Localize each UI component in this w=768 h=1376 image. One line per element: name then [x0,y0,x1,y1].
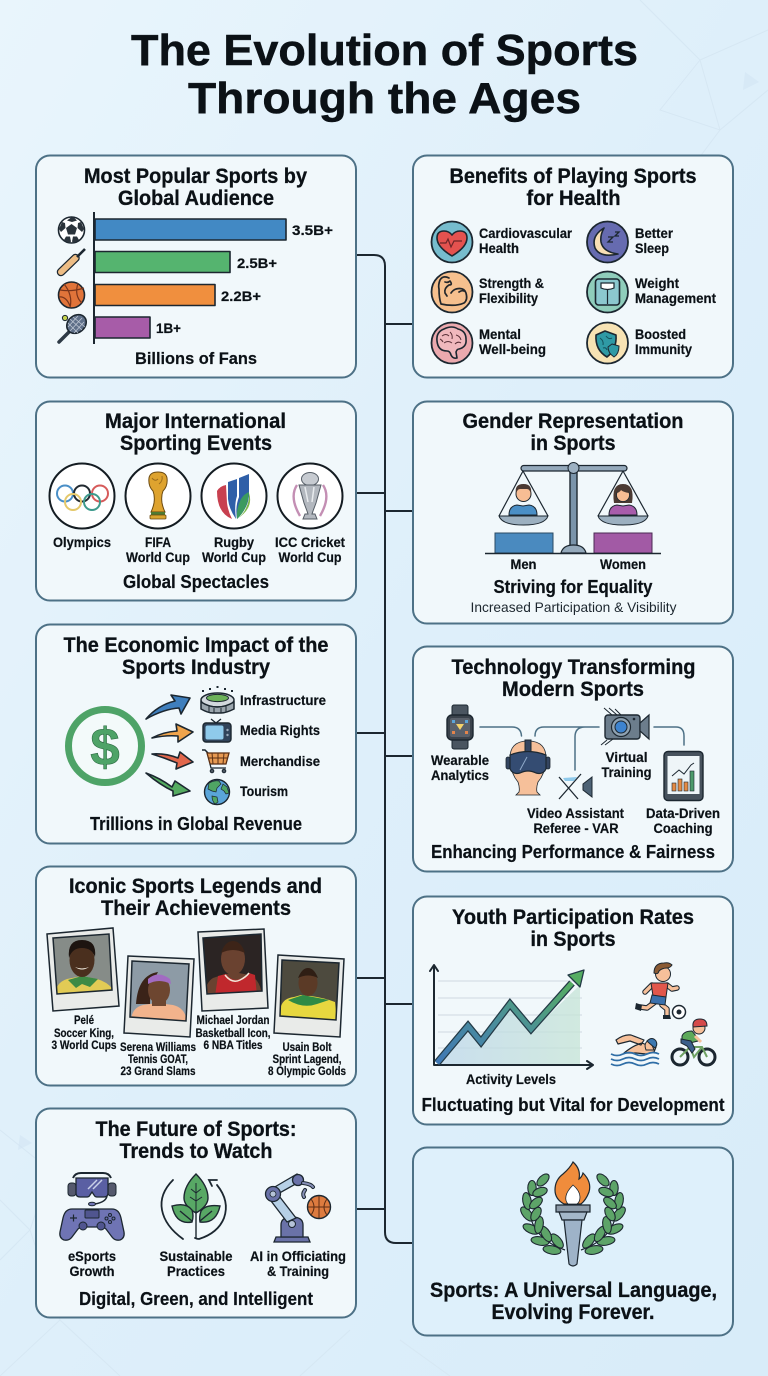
icon: child running with ball [635,963,686,1019]
heading: events [105,410,286,455]
icon: torch and laurel [518,1162,628,1266]
heading: youth: Youth Participation Rates [452,906,694,929]
trend: ai robot arm [250,1174,346,1279]
title [131,26,638,123]
connectors between technologies [480,727,684,770]
icon: soccer ball [58,217,84,243]
trend: sustainable practices: Sustainable [160,1249,233,1264]
icon: basketball [58,282,84,308]
heading: technology [452,656,696,701]
label: women: Women [600,557,646,572]
heading: most popular sports: Most Popular Sports by [84,165,307,188]
benefit: weight management: Management [635,290,716,306]
legend: pele: Soccer King, [54,1028,114,1040]
stream: merchandise [202,750,320,773]
icon: dollar coin: $ [90,718,120,777]
trend: sustainable practices [160,1174,233,1279]
heading: youth: in Sports [530,928,616,951]
caption: striving for equality: Striving for Equality [494,577,652,597]
panel: most popular sports [36,156,356,378]
tech: wearable analytics [431,705,489,783]
panel: youth participation [413,896,733,1124]
tech: virtual training camera [601,708,652,780]
tech: wearable analytics: Analytics [431,768,489,783]
tech: data-driven coaching: Coaching [654,821,712,836]
legend: michael jordan [196,929,270,1052]
heading: gender [462,410,684,455]
benefit: strength and flexibility [432,272,544,312]
event: rugby world cup [202,464,266,565]
heading: youth [452,906,694,951]
axis label: activity levels: Activity Levels [466,1072,556,1087]
panel: gender representation [413,402,733,624]
tech: virtual training camera: Training [602,765,652,780]
stream: infrastructure [201,686,326,713]
legend: serena williams [120,956,196,1078]
legend: usain bolt: Sprint Lagend, [272,1054,342,1066]
heading: economic impact [64,634,328,679]
caption: digital green intelligent: Digital, Green, and Intelligent [79,1289,313,1309]
panel: economic impact [36,624,356,844]
legend: serena williams: 23 Grand Slams [120,1066,196,1078]
heading: gender: in Sports [530,432,616,455]
benefit: mental well-being: Mental [479,326,521,342]
trend: sustainable practices: Practices [167,1264,225,1279]
caption: global spectacles: Global Spectacles [123,572,269,592]
caption: billions of fans: Billions of Fans [135,349,257,368]
legend: usain bolt: Usain Bolt [282,1042,332,1054]
stream: merchandise: Merchandise [240,753,320,769]
bar chart: audience: 2.5B+ [237,255,277,271]
event: fifa world cup [126,464,190,565]
benefit: cardiovascular health: Health [479,240,519,256]
event: icc cricket world cup: ICC Cricket [275,535,345,550]
benefit: boosted immunity: Boosted [635,326,686,342]
caption: fluctuating but vital: Fluctuating but Vital for Development [422,1095,725,1115]
heading: economic impact: Sports Industry [122,656,270,679]
panel: closing message [413,1148,733,1336]
closing statement: Sports: A Universal Language, [430,1279,717,1302]
benefit: better sleep: Sleep [635,240,669,256]
icon: tennis racket [59,311,90,342]
legend: michael jordan: Michael Jordan [196,1015,270,1027]
event: fifa world cup: World Cup [126,550,190,565]
heading: future [96,1118,296,1163]
benefit: weight management [587,272,716,312]
benefit: better sleep: Better [635,225,674,241]
benefit: strength and flexibility: Strength & [479,275,544,291]
legend: pele [47,928,119,1052]
benefit: boosted immunity: Immunity [635,341,692,357]
bar chart: audience [94,212,333,344]
heading: legends: Iconic Sports Legends and [69,875,322,898]
tech: data-driven coaching [646,752,720,836]
benefit: weight management: Weight [635,275,679,291]
trend: ai robot arm: & Training [267,1264,329,1279]
line chart: activity levels [430,965,593,1069]
trend: ai robot arm: AI in Officiating [250,1249,346,1264]
connector timeline [356,255,413,1243]
legend: michael jordan: Basketball Icon, [196,1028,270,1040]
panel: technology [413,646,733,872]
stream: media rights: Media Rights [240,722,320,738]
heading: benefits: Benefits of Playing Sports [450,165,696,188]
benefit: boosted immunity [587,322,692,364]
legend: usain bolt: 8 Olympic Golds [268,1066,346,1078]
event: icc cricket world cup: World Cup [278,550,342,565]
title: Through the Ages [188,74,581,123]
legend: pele: Pelé [74,1015,94,1027]
benefit: mental well-being [432,322,546,364]
label: men: Men [510,557,536,572]
heading: legends [69,875,322,920]
stream: infrastructure: Infrastructure [240,692,326,708]
event: rugby world cup: Rugby [214,535,254,550]
icon: dollar coin [68,710,142,782]
event: rugby world cup: World Cup [202,550,266,565]
panel: benefits of sports [413,156,733,378]
tech: var: Video Assistant [527,806,624,821]
tech: wearable analytics: Wearable [431,753,489,768]
panel: future of sports [36,1108,356,1318]
legend: serena williams: Tennis GOAT, [128,1054,188,1066]
legend: michael jordan: 6 NBA Titles [204,1040,262,1052]
heading: gender: Gender Representation [462,410,684,433]
event: fifa world cup: FIFA [145,535,171,550]
figure: man on scale [499,484,548,525]
heading: benefits: for Health [526,187,620,210]
heading: events: Major International [105,410,286,433]
closing statement [430,1279,717,1324]
legend: pele: 3 World Cups [52,1040,116,1052]
heading: most popular sports: Global Audience [118,187,274,210]
benefit: strength and flexibility: Flexibility [479,290,538,306]
heading: benefits [450,165,696,210]
stream: tourism: Tourism [240,783,288,799]
trend: esports growth: eSports [68,1249,116,1264]
heading: future: Trends to Watch [120,1140,272,1163]
benefit: cardiovascular health: Cardiovascular [479,225,572,241]
figure: woman on scale [598,484,648,525]
trend: esports growth [60,1173,124,1279]
heading: legends: Their Achievements [101,897,291,920]
subcaption: participation and visibility: Increased Participation & Visibility [470,599,676,615]
panel: major international events [36,402,356,600]
benefit: better sleep [587,222,674,262]
heading: technology: Technology Transforming [452,656,696,679]
trend: esports growth: Growth [70,1264,114,1279]
arrows: revenue flows [146,695,193,796]
bar chart: audience: 2.2B+ [221,288,261,304]
heading: technology: Modern Sports [502,678,644,701]
closing statement: Evolving Forever. [492,1301,654,1324]
legend: usain bolt [268,955,346,1078]
heading: economic impact: The Economic Impact of the [64,634,328,657]
heading: future: The Future of Sports: [96,1118,296,1141]
panel: sports legends [36,866,356,1086]
icon: swimmer [611,1035,659,1066]
tech: data-driven coaching: Data-Driven [646,806,720,821]
stream: tourism [204,780,288,804]
title: The Evolution of Sports [131,26,638,75]
event: olympics: Olympics [53,535,111,550]
benefit: cardiovascular health [432,222,572,262]
caption: enhancing performance: Enhancing Performance & Fairness [431,842,715,862]
event: icc cricket world cup [275,464,345,565]
illustration: balance scale [485,462,661,554]
stream: media rights [203,719,320,742]
bar chart: audience: 1B+ [156,320,181,336]
heading: events: Sporting Events [120,432,272,455]
icon: cyclist [672,1019,715,1065]
event: olympics [50,464,114,550]
tech: var [527,774,624,836]
tech: var: Referee - VAR [534,821,619,836]
benefit: mental well-being: Well-being [479,341,546,357]
bar chart: audience: 3.5B+ [292,222,333,238]
tech: virtual training camera: Virtual [606,750,648,765]
heading: most popular sports [84,165,307,210]
icon: cricket bat [61,249,85,272]
legend: serena williams: Serena Williams [120,1042,196,1054]
caption: trillions in global revenue: Trillions in Global Revenue [90,814,302,834]
tech: vr headset [506,740,550,795]
